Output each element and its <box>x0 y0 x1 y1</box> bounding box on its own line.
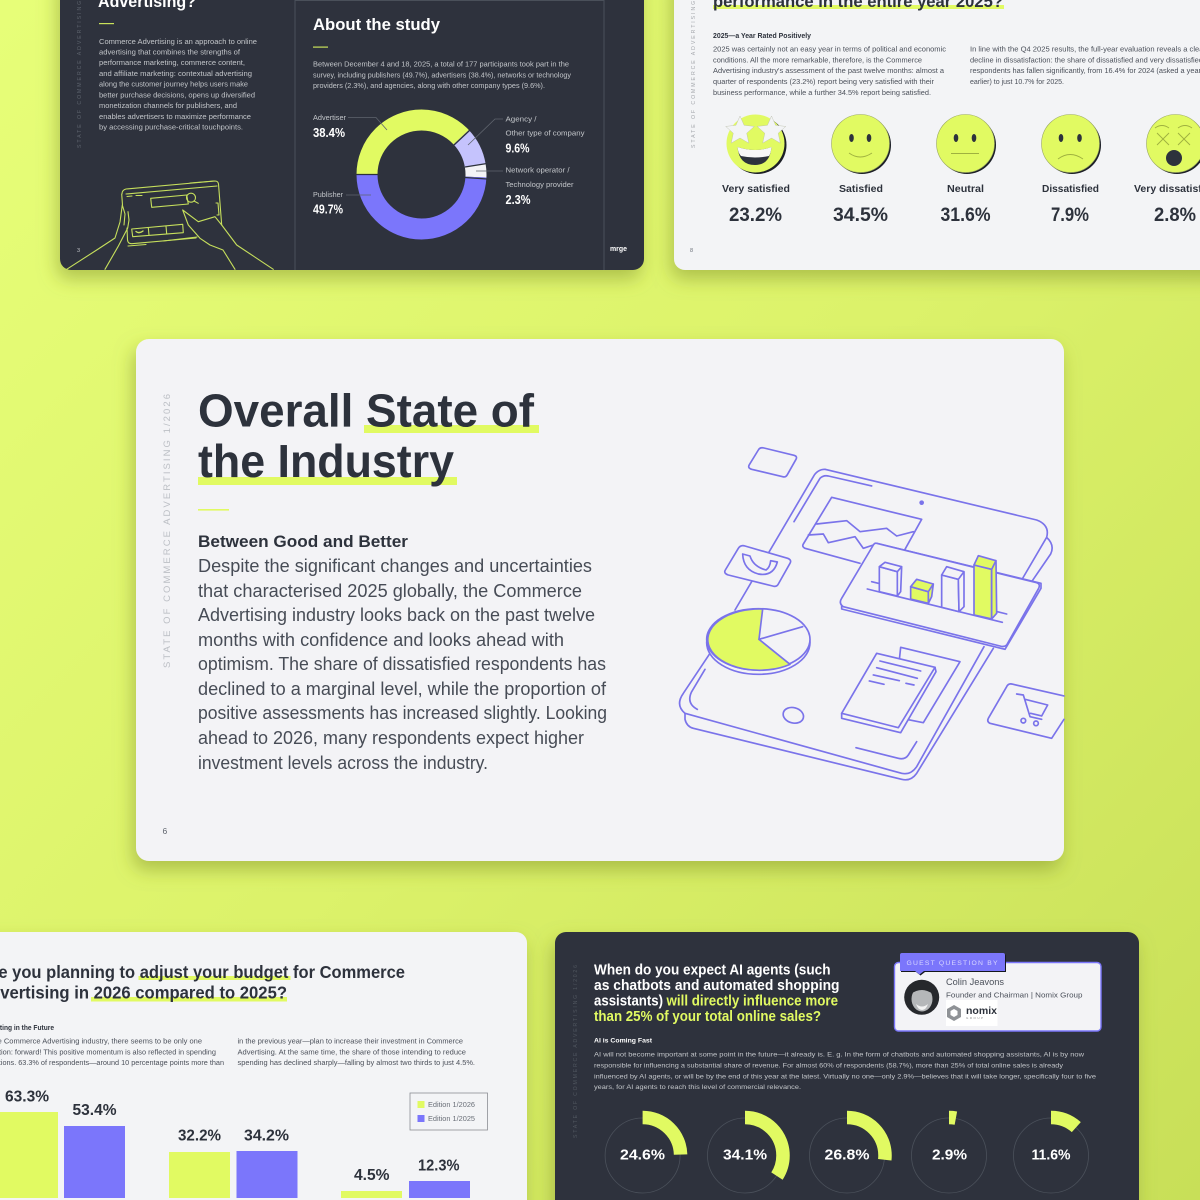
title: Overall State of <box>198 384 535 436</box>
gauge: 26.8%: 26.8% <box>824 1146 870 1164</box>
text column one <box>0 1038 224 1067</box>
callout: guest question <box>894 953 1101 1031</box>
tag: GUEST QUESTION BY <box>906 960 998 967</box>
label: advertiser: 38.4% <box>313 126 345 140</box>
floating card <box>749 448 797 477</box>
body text: that characterised 2025 globally, the Commerce <box>198 581 582 601</box>
stat: very satisfied <box>722 183 790 226</box>
bars: decrease: 12.3% <box>418 1158 460 1174</box>
definition text: better purchase decisions, opens up diversified <box>99 92 255 100</box>
study text: Between December 4 and 18, 2025, a total of 177 participants took part in the <box>313 62 569 68</box>
body text: optimism. The share of dissatisfied respondents has <box>198 654 606 674</box>
logo: nomix: GROUP <box>966 1016 983 1020</box>
portrait <box>904 980 939 1015</box>
pie chart <box>707 609 810 674</box>
panel: budget page bottom left <box>0 932 527 1200</box>
guest name: Colin Jeavons <box>946 977 1005 987</box>
gauge: 2.9% <box>911 1118 987 1194</box>
gauge: 11.6% <box>1013 1118 1089 1194</box>
tag <box>900 953 1006 976</box>
stat: dissatisfied <box>1042 183 1099 226</box>
logo: nomix <box>946 1000 998 1026</box>
body text: responsible for influencing a substantial share of revenue. For almost 60% of respondents (58.7%), more than 25% of total online sales is already <box>594 1062 1064 1070</box>
icon: dissatisfied face <box>1042 114 1101 174</box>
text column one: business performance, while a further 34.5% report being satisfied. <box>713 90 931 97</box>
text column one: Advertising industry's assessment of the past twelve months: almost a <box>713 68 944 75</box>
bars: decrease: 4.5% <box>354 1167 390 1184</box>
label: publisher <box>313 192 344 216</box>
panel: satisfaction page top right <box>674 0 1200 270</box>
bars: increase: 63.3% <box>5 1088 49 1106</box>
vertical label: STATE OF COMMERCE ADVERTISING 1/2026 <box>573 965 579 1138</box>
body text <box>594 1052 1096 1091</box>
label: network operator: Technology provider <box>506 182 574 189</box>
text column two: in the previous year—plan to increase their investment in Commerce <box>238 1038 463 1046</box>
heading: about the study: About the study <box>313 15 441 34</box>
text column two: spending has declined sharply—falling by almost two thirds to just 4.5%. <box>238 1060 475 1067</box>
gauge: 24.6%: 24.6% <box>620 1146 665 1164</box>
body text: positive assessments has increased slightly. Looking <box>198 703 607 723</box>
page number: 3 <box>77 248 80 254</box>
stat: very dissatisfied: 2.8% <box>1154 204 1196 226</box>
line chart <box>803 497 922 563</box>
study text: survey, including publishers (49.7%), advertisers (38.4%), networks or technology <box>313 72 571 80</box>
question heading: as chatbots and automated shopping <box>594 978 840 994</box>
bars: increase: 53.4% <box>72 1102 116 1119</box>
definition text <box>99 39 257 132</box>
definition text: Commerce Advertising is an approach to online <box>99 39 257 46</box>
label: agency: 9.6% <box>506 142 530 156</box>
gauge: 34.1%: 34.1% <box>723 1146 767 1164</box>
bars: unchanged: 34.2% <box>244 1128 289 1144</box>
stat: very satisfied: 23.2% <box>729 204 782 226</box>
icon: satisfied face <box>832 114 891 174</box>
question heading: than 25% of your total online sales? <box>594 1009 821 1025</box>
bars: decrease <box>341 1158 470 1198</box>
label: advertiser <box>313 115 347 140</box>
title <box>198 384 539 487</box>
text column two: In line with the Q4 2025 results, the full-year evaluation reveals a clear <box>970 46 1200 54</box>
label: network operator <box>506 168 574 207</box>
legend <box>410 1093 488 1130</box>
panel: about the study <box>295 0 604 270</box>
bars: unchanged: 32.2% <box>178 1128 221 1144</box>
body text: investment levels across the industry. <box>198 753 488 773</box>
text column two <box>238 1038 475 1067</box>
subheading: 2025—a Year Rated Positively <box>713 33 811 40</box>
panel: overall state of the industry <box>136 339 1064 861</box>
accent dash <box>198 509 229 511</box>
definition text: advertising that combines the strengths of <box>99 50 240 56</box>
document <box>842 647 960 733</box>
definition text: enables advertisers to maximize performance <box>99 114 251 121</box>
body text: Despite the significant changes and uncertainties <box>198 556 592 576</box>
label: network operator: 2.3% <box>506 193 530 207</box>
gauge: 34.1% <box>707 1118 783 1194</box>
icon: very satisfied face <box>726 114 786 174</box>
bars: increase <box>0 1088 125 1198</box>
logo: nomix: nomix <box>966 1005 997 1017</box>
question heading <box>594 962 840 1025</box>
text column two <box>970 46 1200 86</box>
text column one <box>713 46 947 97</box>
smile card <box>725 546 791 586</box>
subheading: AI is Coming Fast <box>594 1038 653 1044</box>
subheading: Between Good and Better <box>198 532 408 551</box>
stat: satisfied: Satisfied <box>839 183 883 195</box>
gauge: 2.9%: 2.9% <box>932 1146 967 1164</box>
vertical label: STATE OF COMMERCE ADVERTISING 1/2026 <box>162 394 173 668</box>
label: publisher: Publisher <box>313 192 344 199</box>
definition text: monetization channels for publishers, and <box>99 103 237 110</box>
shopping cart card <box>988 684 1064 738</box>
text column one: quarter of respondents (23.2%) report being very satisfied with their <box>713 79 935 86</box>
label: agency: Agency / <box>506 116 537 124</box>
stat: satisfied: 34.5% <box>833 204 888 226</box>
guest role: Founder and Chairman | Nomix Group <box>946 990 1082 1000</box>
tablet body <box>680 469 1052 780</box>
body text: influenced by AI agents, or will be by the end of this year at the latest. Virtually no one—only 2.9%—believes that it will take longer, specifically four to five <box>594 1074 1096 1080</box>
body text: Advertising industry looks back on the past twelve <box>198 605 595 625</box>
text column two: respondents has fallen significantly, from 16.4% for 2024 (asked a year <box>970 68 1200 75</box>
page number: 8 <box>690 248 693 254</box>
text column one: 2025 was certainly not an easy year in terms of political and economic <box>713 46 947 54</box>
gauge: 11.6%: 11.6% <box>1032 1146 1070 1164</box>
icon: neutral face <box>936 114 996 174</box>
question heading <box>0 962 405 1002</box>
bars: unchanged <box>169 1128 298 1198</box>
stat: satisfied <box>833 183 888 226</box>
logo: mrge: mrge <box>610 244 627 253</box>
definition text: and affiliate marketing: contextual advertising <box>99 71 252 78</box>
body text: AI will not become important at some point in the future—it already is. E. g. In the form of chatbots and automated shopping assistants, AI is by now <box>594 1052 1084 1058</box>
body text <box>198 556 607 773</box>
definition text: by accessing purchase-critical touchpoints. <box>99 124 243 132</box>
gauge: 26.8% <box>809 1118 885 1194</box>
donut chart <box>356 120 487 229</box>
body text: ahead to 2026, many respondents expect higher <box>198 728 584 748</box>
stat: very dissatisfied <box>1134 183 1200 226</box>
gauge: 24.6% <box>605 1118 681 1194</box>
stat: very satisfied: Very satisfied <box>722 183 790 195</box>
body text: years, for AI agents to reach this level of commercial relevance. <box>594 1084 801 1091</box>
study text: providers (2.3%), and agencies, along with other company types (9.6%). <box>313 83 545 90</box>
study text <box>313 62 571 90</box>
definition text: along the customer journey helps users make <box>99 82 248 88</box>
accent dash <box>99 23 114 24</box>
body text: declined to a marginal level, while the proportion of <box>198 679 607 699</box>
title: the Industry <box>198 435 454 487</box>
bar chart card <box>840 543 1041 649</box>
legend: Edition 1/2026 <box>428 1102 475 1109</box>
body text: months with confidence and looks ahead with <box>198 630 564 650</box>
label: agency <box>506 116 585 156</box>
illustration: isometric tablet with charts <box>680 448 1064 780</box>
label: network operator: Network operator / <box>506 168 570 174</box>
stat: dissatisfied: Dissatisfied <box>1042 183 1099 195</box>
label: publisher: 49.7% <box>313 202 343 216</box>
page number: 6 <box>162 826 168 836</box>
question heading: assistants) <box>594 994 663 1010</box>
stat: neutral: 31.6% <box>940 204 990 226</box>
icon: hands on tablet <box>67 181 273 269</box>
icon: very dissatisfied face <box>1146 114 1200 174</box>
panel: AI agents page bottom right <box>555 932 1139 1200</box>
text column two: decline in dissatisfaction: the share of dissatisfied and very dissatisfied <box>970 58 1200 64</box>
question heading: will directly influence more <box>666 994 838 1010</box>
question heading: When do you expect AI agents (such <box>594 962 830 978</box>
stat: dissatisfied: 7.9% <box>1051 204 1089 226</box>
legend: Edition 1/2025 <box>428 1116 475 1123</box>
stat: neutral: Neutral <box>947 183 984 195</box>
text column two: Advertising. At the same time, the share of those intending to reduce <box>238 1050 466 1056</box>
accent dash <box>313 46 328 48</box>
stat: neutral <box>940 183 990 226</box>
text column two: earlier) to just 10.7% for 2025. <box>970 79 1064 86</box>
panel: dark study page top left <box>60 0 644 270</box>
bar chart <box>0 1088 470 1198</box>
text column one: conditions. All the more remarkable, therefore, is the Commerce <box>713 58 922 64</box>
leader lines <box>346 118 503 195</box>
label: agency: Other type of company <box>506 130 585 138</box>
label: advertiser: Advertiser <box>313 115 347 122</box>
definition text: performance marketing, commerce content, <box>99 60 245 67</box>
